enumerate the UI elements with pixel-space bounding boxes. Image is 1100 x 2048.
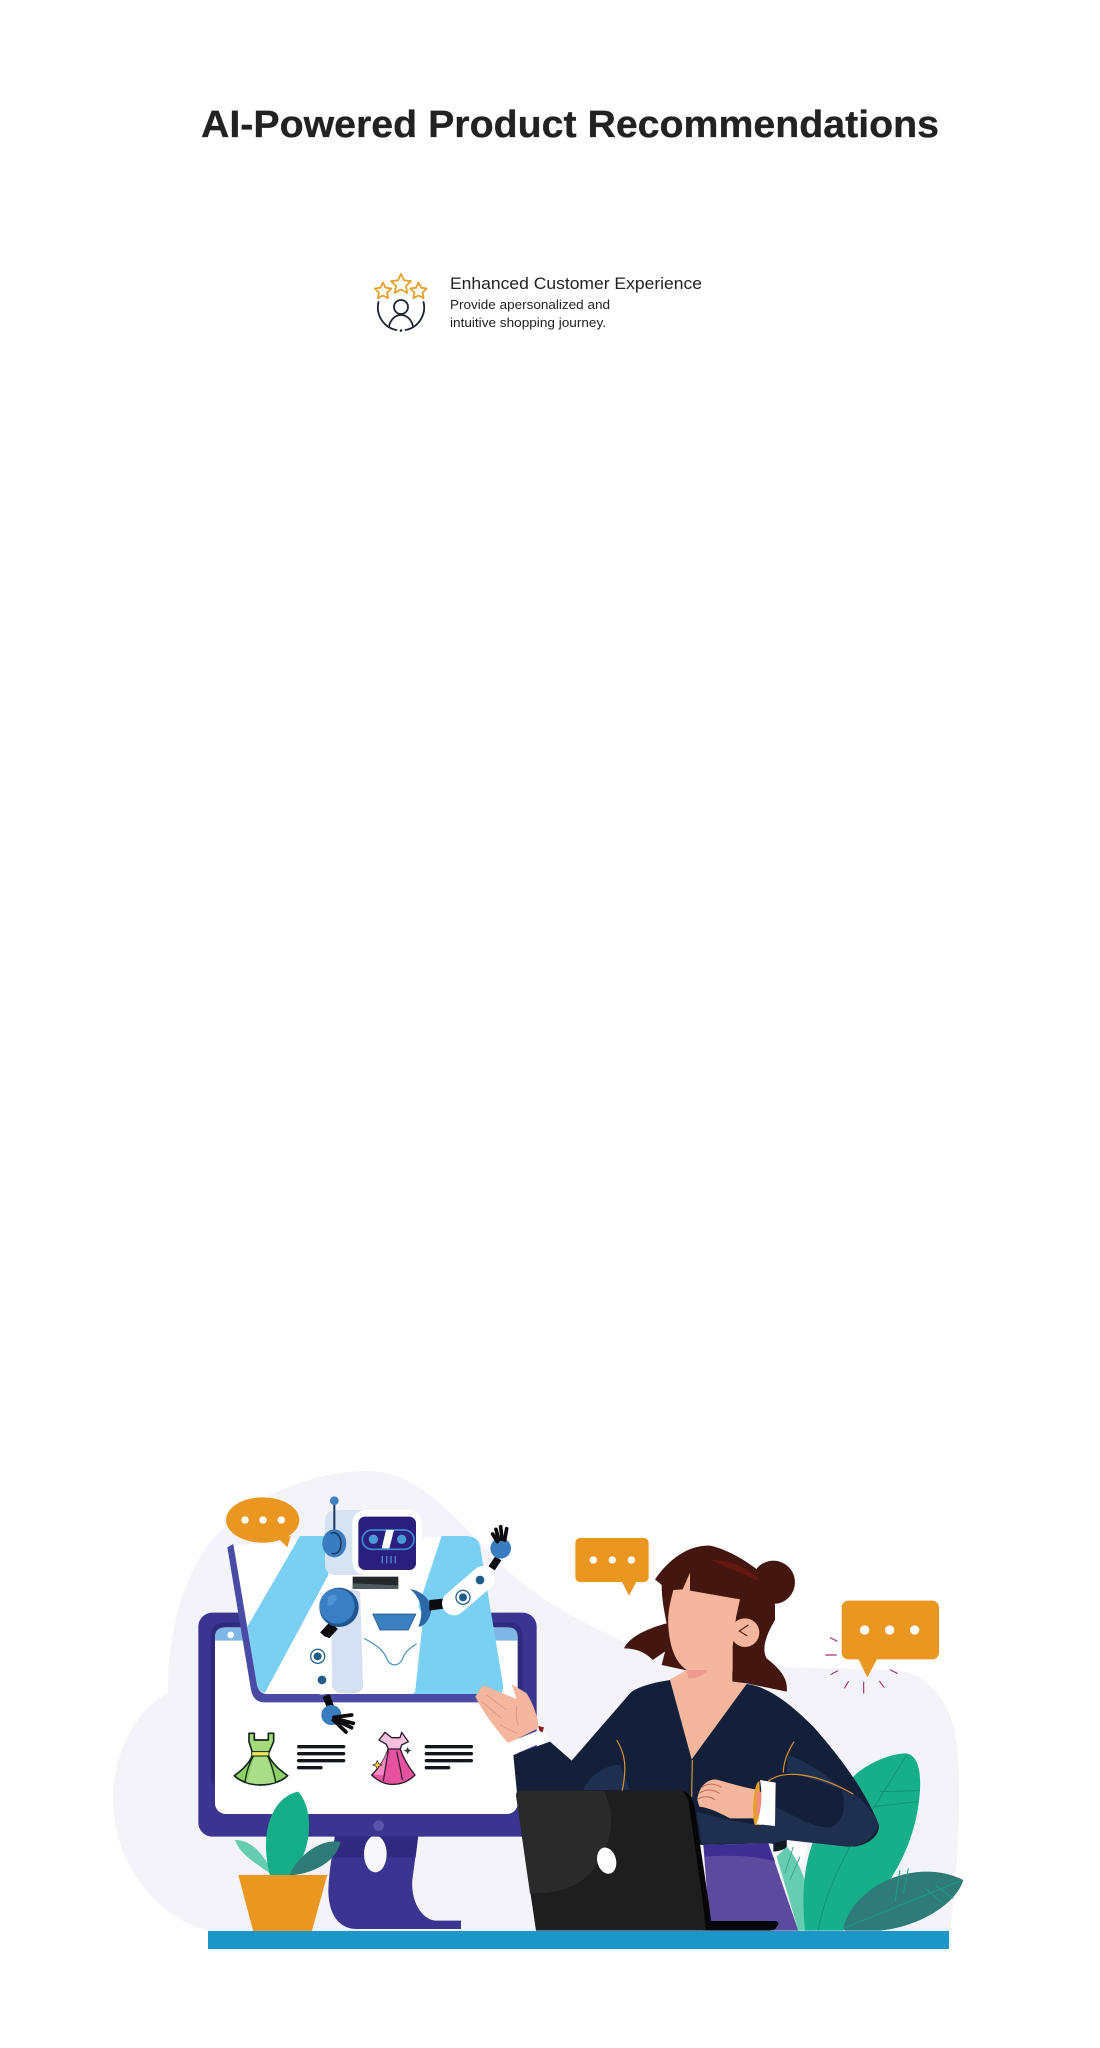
icon: pink dress <box>372 1732 415 1784</box>
speech bubble: left <box>226 1497 299 1547</box>
spark lines <box>825 1638 898 1693</box>
monitor <box>198 1613 537 1837</box>
feature block: enhanced customer experience <box>375 274 702 331</box>
hair <box>624 1546 795 1692</box>
pop-out tablet <box>227 1536 503 1702</box>
monitor stand <box>328 1835 461 1929</box>
skirt <box>703 1843 798 1931</box>
laptop <box>516 1791 778 1931</box>
robot right arm <box>429 1527 511 1611</box>
background blob <box>113 1471 959 1931</box>
feature heading: Enhanced Customer Experience <box>450 274 702 293</box>
right part: woman, laptop, plant <box>475 1538 963 1931</box>
text lines: green dress <box>299 1747 344 1768</box>
speech bubble: right <box>842 1601 939 1677</box>
text lines: pink dress <box>426 1747 471 1768</box>
left part: monitor, robot, plant <box>198 1496 537 1932</box>
icon: green dress <box>234 1733 288 1785</box>
illustration: AI shopping assistant scene <box>113 1471 963 1949</box>
feature description: intuitive shopping journey. <box>450 315 606 330</box>
face <box>668 1573 759 1678</box>
feature description: Provide apersonalized and <box>450 297 610 312</box>
title: AI-Powered Product Recommendations <box>201 104 939 146</box>
speech bubble: middle <box>575 1538 649 1596</box>
neck and chest <box>670 1670 747 1760</box>
potted plant <box>235 1792 341 1932</box>
icon: customer with three stars <box>375 274 427 331</box>
robot neck <box>353 1577 398 1589</box>
robot left arm <box>309 1588 359 1732</box>
right plant <box>777 1753 963 1931</box>
resting hand <box>697 1780 776 1826</box>
robot head <box>322 1496 422 1575</box>
desk <box>208 1931 949 1949</box>
feature description <box>450 297 610 330</box>
robot <box>309 1496 511 1732</box>
jacket <box>513 1680 879 1852</box>
robot body <box>332 1589 431 1693</box>
raised hand <box>475 1684 548 1756</box>
